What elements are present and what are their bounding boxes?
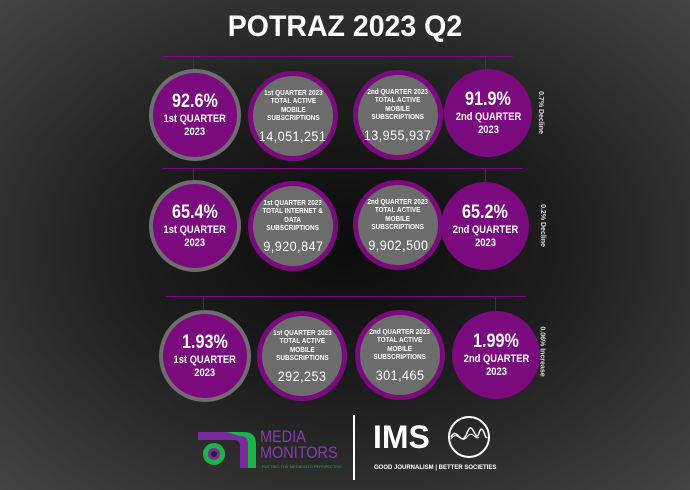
circle: Q1 internet: 1st QUARTER 2023	[264, 198, 322, 206]
circle: Q1 subs: SUBSCRIPTIONS	[276, 353, 328, 362]
circle: Q2 subscriptions	[353, 70, 443, 160]
circle: 91.9% Q2: 2nd QUARTER	[455, 111, 521, 123]
circle: Q1 internet: 9,920,847	[263, 238, 323, 254]
circle: 92.6% Q1	[149, 69, 241, 161]
circle: Q1 subs: TOTAL ACTIVE	[279, 336, 325, 345]
circle: Q1 subscriptions: MOBILE	[281, 104, 305, 114]
circle: Q1 subscriptions: TOTAL ACTIVE	[270, 96, 316, 105]
title: POTRAZ 2023 Q2	[228, 10, 462, 43]
circle: Q2 subscriptions: 2nd QUARTER 2023	[368, 86, 428, 96]
circle: Q2 subs: 2nd QUARTER 2023	[370, 326, 430, 336]
circle: 92.6% Q1: 1st QUARTER	[164, 113, 226, 125]
circle: 91.9% Q2	[444, 69, 532, 157]
circle: Q1 internet	[248, 181, 338, 271]
circle: Q2 internet: 9,902,500	[368, 236, 428, 252]
circle: Q1 internet: SUBSCRIPTIONS	[267, 223, 319, 232]
circle: 1.93% Q1: 2023	[195, 367, 215, 379]
circle: Q1 subscriptions	[248, 71, 338, 161]
side note: 0.2% Decline	[539, 204, 546, 247]
circle: Q1 subscriptions: 14,051,251	[259, 128, 327, 144]
circle: 65.2% Q2: 2023	[475, 237, 495, 249]
circle: Q1 subscriptions: 1st QUARTER 2023	[264, 88, 322, 96]
logo: Media Monitors: MONITORS	[260, 443, 338, 462]
logo: Media Monitors: PUTTING THE MEDIA INTO PERSPECTIVE	[262, 464, 342, 469]
circle: Q2 subs: TOTAL ACTIVE	[377, 335, 423, 344]
circle: 91.9% Q2: 2023	[478, 124, 498, 136]
circle: Q2 subscriptions: MOBILE	[386, 104, 410, 112]
circle: 92.6% Q1: 2023	[185, 126, 205, 138]
circle: 65.2% Q2: 2nd QUARTER	[452, 224, 518, 236]
row 2: internet & data	[149, 180, 546, 272]
circle: Q1 subs: 292,253	[278, 368, 326, 384]
circle: Q1 subs: MOBILE	[290, 344, 314, 354]
circle: Q1 internet: TOTAL INTERNET &	[263, 206, 323, 215]
circle: 1.93% Q1	[159, 310, 251, 402]
circle: Q2 internet: SUBSCRIPTIONS	[372, 222, 424, 231]
circle: Q1 subs: 1st QUARTER 2023	[273, 328, 331, 336]
circle: 1.93% Q1: 1.93%	[182, 332, 228, 353]
circle: 91.9% Q2: 91.9%	[465, 89, 511, 110]
circle: 65.4% Q1	[149, 180, 241, 272]
circle: Q1 internet: DATA	[285, 214, 301, 224]
circle: Q2 subscriptions: TOTAL ACTIVE	[375, 95, 421, 104]
circle: 65.2% Q2	[441, 182, 529, 270]
circle: 92.6% Q1: 92.6%	[172, 91, 218, 112]
circle: Q2 internet: MOBILE	[386, 214, 410, 222]
circle: Q2 internet	[353, 180, 443, 270]
row 3	[159, 310, 546, 402]
logo: IMS	[373, 416, 496, 471]
circle: 65.4% Q1: 2023	[185, 237, 205, 249]
circle: 1.99% Q2: 2023	[486, 366, 506, 378]
circle: Q2 subs: 301,465	[376, 366, 424, 382]
logo: IMS: GOOD JOURNALISM | BETTER SOCIETIES	[374, 465, 496, 471]
logo: Media Monitors: MEDIA	[260, 427, 306, 446]
circle: Q2 subscriptions: 13,955,937	[364, 126, 432, 142]
logo: Media Monitors	[198, 427, 342, 469]
logo: IMS: IMS	[373, 419, 430, 455]
circle: Q2 internet: 2nd QUARTER 2023	[368, 196, 428, 206]
circle: Q2 subscriptions: SUBSCRIPTIONS	[372, 112, 424, 121]
circle: 65.2% Q2: 65.2%	[462, 202, 508, 223]
circle: Q1 subs	[257, 311, 347, 401]
circle: 1.99% Q2: 2nd QUARTER	[463, 353, 529, 365]
circle: 1.99% Q2: 1.99%	[473, 331, 519, 352]
circle: Q1 subscriptions: SUBSCRIPTIONS	[267, 113, 319, 122]
circle: 1.93% Q1: 1st QUARTER	[174, 354, 236, 366]
circle: Q2 internet: TOTAL ACTIVE	[375, 205, 421, 214]
circle: 65.4% Q1: 1st QUARTER	[164, 224, 226, 236]
circle: 65.4% Q1: 65.4%	[172, 202, 218, 223]
circle: 1.99% Q2	[452, 311, 540, 399]
circle: Q2 subs: SUBSCRIPTIONS	[374, 352, 426, 361]
side note: 0.7% Decline	[537, 91, 544, 134]
circle: Q2 subs	[355, 310, 445, 400]
circle: Q2 subs: MOBILE	[388, 344, 412, 352]
row 1: mobile penetration	[149, 69, 544, 161]
side note: 0.06% Increase	[539, 326, 546, 377]
